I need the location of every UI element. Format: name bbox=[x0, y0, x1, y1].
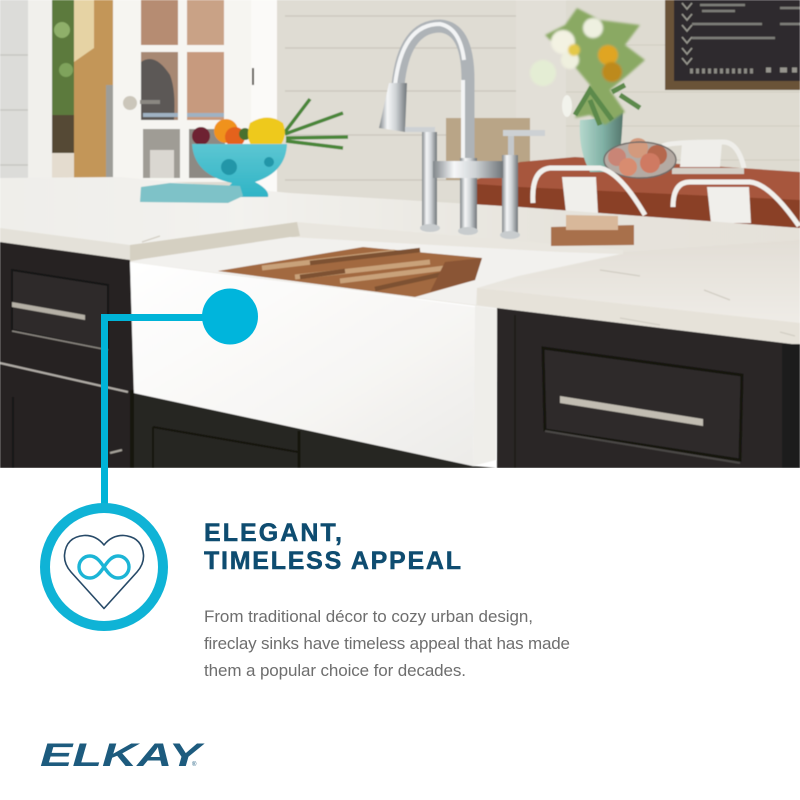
chalkboard bbox=[665, 0, 800, 90]
countertop bbox=[0, 177, 800, 345]
heading: TIMELESS APPEAL bbox=[204, 547, 461, 575]
infinity symbol bbox=[79, 556, 129, 578]
right cabinet with drawer bbox=[497, 308, 800, 468]
heading bbox=[204, 519, 461, 575]
cutting board bbox=[218, 247, 482, 297]
body text: fireclay sinks have timeless appeal that has made bbox=[204, 634, 570, 653]
callout connector from sink to icon bbox=[101, 288, 258, 508]
heading: ELEGANT, bbox=[204, 519, 342, 547]
Elkay logo: ELKAY bbox=[40, 737, 205, 773]
kitchen photograph bbox=[0, 0, 800, 468]
body text bbox=[204, 607, 570, 680]
sink rim and basin bbox=[130, 222, 623, 305]
background wall bbox=[0, 0, 800, 240]
left cabinets bbox=[0, 242, 135, 468]
Elkay logo: ® bbox=[192, 761, 197, 768]
white lower panel bbox=[0, 468, 800, 800]
body text: them a popular choice for decades. bbox=[204, 661, 466, 680]
icon: heart with infinity in ring bbox=[45, 508, 163, 626]
lower sink cabinets bbox=[134, 393, 496, 468]
glass door and garden view bbox=[28, 0, 277, 192]
colander with vegetables bbox=[192, 99, 348, 197]
Elkay logo bbox=[40, 737, 205, 773]
heart outline bbox=[64, 535, 144, 608]
towel bbox=[140, 183, 243, 203]
dining chairs bbox=[533, 168, 799, 226]
body text: From traditional décor to cozy urban design, bbox=[204, 607, 533, 626]
soap on wooden tray bbox=[551, 215, 634, 246]
sink apron bbox=[130, 262, 497, 466]
bridge faucet bbox=[379, 24, 545, 239]
fruit basket bbox=[604, 138, 676, 178]
callout dot on sink bbox=[202, 288, 258, 344]
bowl bbox=[192, 144, 287, 197]
vase and flowers bbox=[530, 8, 645, 172]
dining table and far chair bbox=[446, 118, 800, 230]
